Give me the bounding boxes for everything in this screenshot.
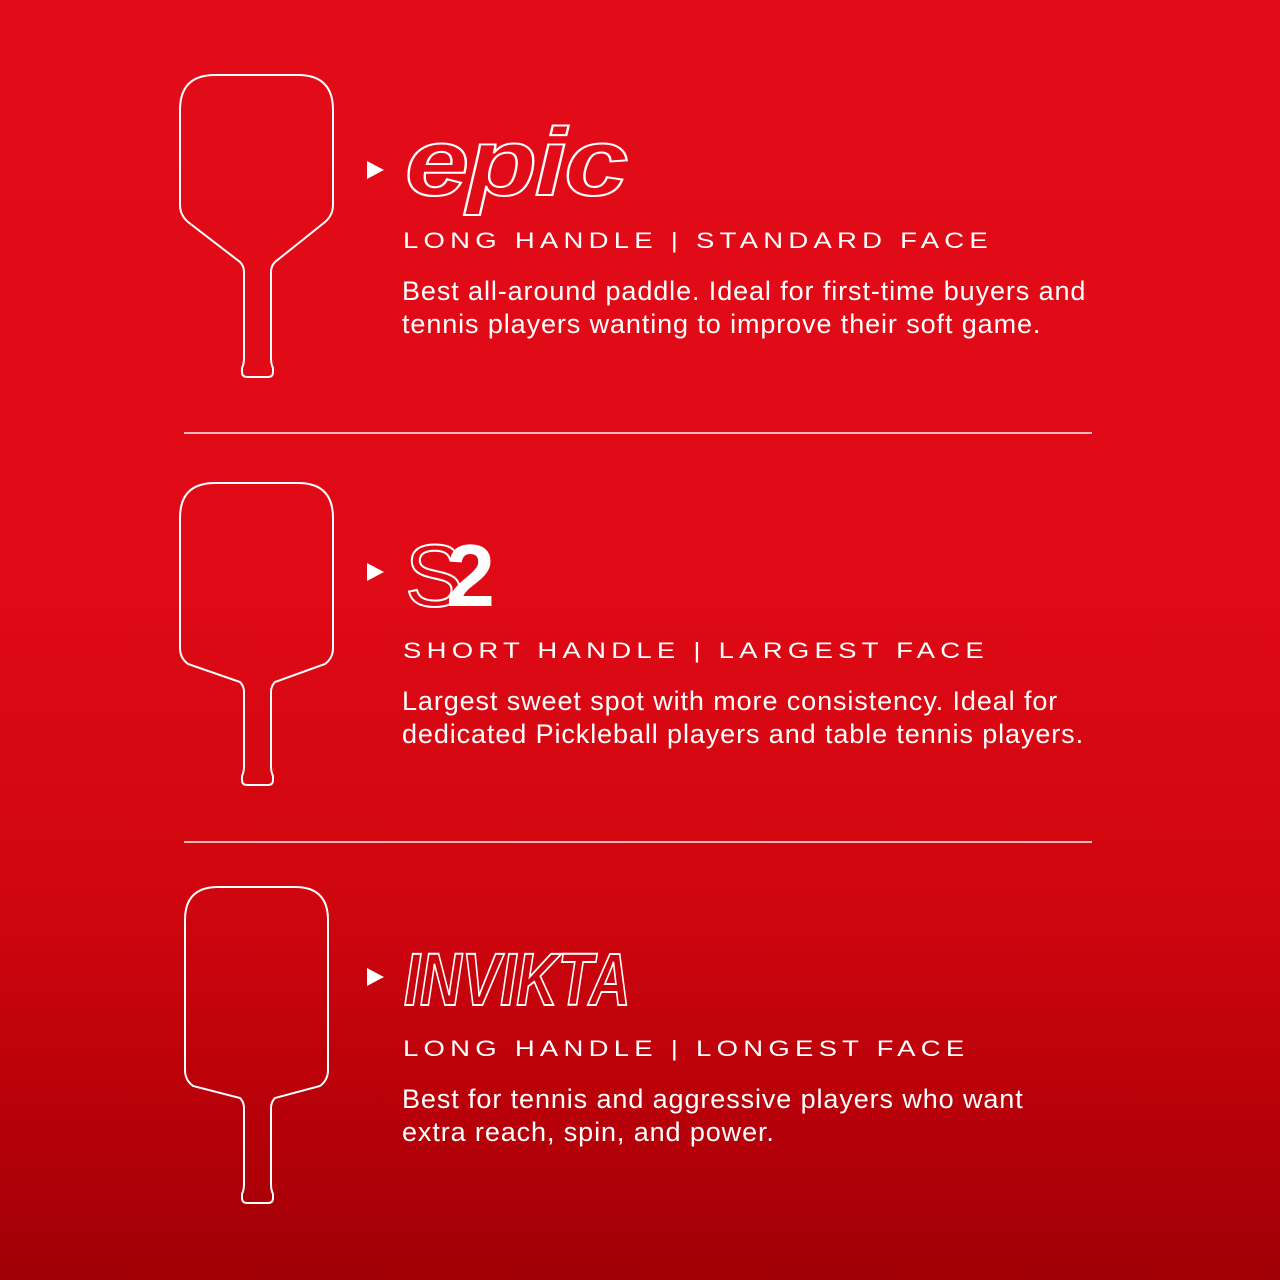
icon: paddle s2	[180, 483, 333, 785]
logo: s2	[405, 526, 495, 625]
logo: invikta: INVIKTA	[404, 939, 631, 1022]
arrows	[367, 161, 384, 986]
description invikta: extra reach, spin, and power.	[402, 1117, 775, 1147]
logo: epic: epic	[405, 109, 627, 216]
description s2	[402, 686, 1084, 749]
icon: paddle invikta	[185, 887, 328, 1203]
subheading epic: LONG HANDLE | STANDARD FACE	[403, 228, 993, 253]
subheading s2: SHORT HANDLE | LARGEST FACE	[403, 638, 989, 663]
description epic: tennis players wanting to improve their soft game.	[402, 309, 1041, 339]
logo: s2: S	[405, 526, 464, 625]
description invikta: Best for tennis and aggressive players who want	[402, 1084, 1024, 1114]
description s2: dedicated Pickleball players and table tennis players.	[402, 719, 1084, 749]
subheading invikta: LONG HANDLE | LONGEST FACE	[403, 1036, 969, 1061]
description invikta	[402, 1084, 1024, 1147]
description s2: Largest sweet spot with more consistency. Ideal for	[402, 686, 1058, 716]
logo: s2: 2	[446, 526, 495, 625]
description epic	[402, 276, 1086, 339]
icon: paddle epic	[180, 75, 333, 377]
description epic: Best all-around paddle. Ideal for first-time buyers and	[402, 276, 1086, 306]
